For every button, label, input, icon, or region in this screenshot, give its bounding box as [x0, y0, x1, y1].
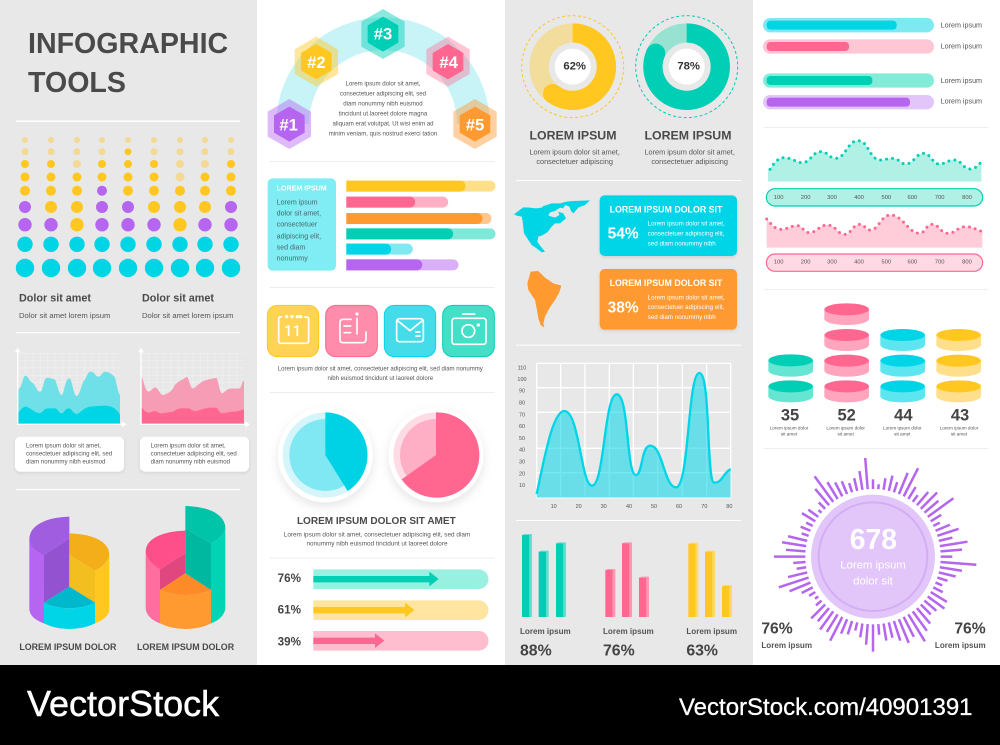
donut captions: Lorem ipsum dolor sit amet,	[529, 147, 620, 156]
arc body text: tincidunt ut laoreet dolore magna	[339, 110, 428, 117]
callout 38%: 38%	[608, 299, 639, 316]
panel: donuts and maps	[514, 16, 741, 346]
dot matrix chart	[16, 137, 240, 277]
panel: horizontal bars text	[268, 178, 336, 271]
axis pill teal: 100	[774, 195, 784, 201]
stat left 76%: Lorem ipsum	[761, 641, 812, 650]
panel: disk stacks and radial chart	[761, 289, 988, 652]
panel: icons, pies and arrows	[267, 305, 494, 651]
chart: pink area	[142, 377, 244, 424]
3D cylinder charts	[19, 506, 235, 652]
hexagon 2: #2	[307, 53, 326, 72]
callout 54%	[600, 195, 737, 256]
callout 38%: sed diam nonummy nibh	[648, 314, 716, 321]
radial ray chart: 678	[850, 524, 897, 556]
progress bar cyan: Lorem ipsum	[941, 22, 982, 30]
axis pill teal: 400	[854, 195, 865, 201]
axis pill teal: 500	[881, 195, 892, 201]
hexagon 4: #4	[439, 53, 459, 72]
line area chart: 80	[519, 401, 525, 407]
chart: cyan area	[18, 372, 120, 424]
cylinder left	[29, 517, 109, 629]
hexagon 1: #1	[279, 115, 298, 134]
icon: camera	[443, 305, 494, 357]
disk stack 44	[880, 329, 925, 436]
axis pill pink: 600	[907, 260, 918, 266]
progress bar purple	[763, 95, 982, 109]
arc body text: minim veniam, quis nostrud exerci tation	[329, 130, 437, 137]
disk stack 52	[824, 303, 869, 436]
arrow bar 39%	[278, 631, 488, 651]
stat left 76%: 76%	[761, 621, 793, 638]
3D bar charts	[516, 520, 741, 660]
line area chart: 50	[651, 504, 657, 510]
chart axes	[15, 348, 250, 427]
stat right 76%: 76%	[954, 621, 986, 638]
line area chart: 100	[517, 377, 527, 383]
pie caption: nonummy nibh euismod tincidunt ut laoreet dolore	[306, 540, 448, 547]
text card right	[140, 437, 249, 472]
line area chart: 30	[519, 459, 525, 465]
footer watermark bar: VectorStock	[27, 683, 220, 724]
donut 62%: 62%	[563, 61, 586, 73]
cylinder captions: LOREM IPSUM DOLOR	[19, 642, 117, 652]
arrow bar 39%: 39%	[278, 635, 302, 648]
title: INFOGRAPHIC	[28, 28, 228, 60]
icon: calendar	[267, 305, 319, 357]
axis pill pink: 500	[881, 260, 892, 266]
callout 54%: sed diam nonummy nibh	[648, 240, 716, 247]
line area chart: 110	[518, 365, 526, 371]
disk stack 44: 44	[894, 406, 913, 424]
axis pill teal: 300	[827, 195, 838, 201]
bars: green	[520, 534, 571, 660]
hexagon 1	[268, 99, 311, 149]
panel: horizontal bars text: Lorem ipsum	[277, 198, 318, 206]
icons caption: Lorem ipsum dolor sit amet, consectetuer adipiscing elit, sed diam nonummy	[278, 366, 484, 372]
line area chart: 80	[726, 504, 732, 510]
donut captions: Lorem ipsum dolor sit amet,	[644, 147, 735, 156]
hexagon 5: #5	[466, 115, 484, 134]
dotted area chart teal	[768, 141, 981, 182]
disk stack 43: sit amet	[951, 431, 968, 436]
axis pill teal: 700	[935, 195, 945, 201]
axis pill teal: 600	[907, 195, 918, 201]
progress bar purple: Lorem ipsum	[941, 98, 982, 106]
line area chart: 10	[519, 483, 525, 489]
text card left: diam nonummy nibh euismod	[26, 458, 105, 465]
disk stack 52: Lorem ipsum dolor	[826, 425, 865, 430]
line area chart: 20	[576, 504, 582, 510]
line area chart: 60	[676, 504, 682, 510]
axis pill pink: 800	[962, 260, 973, 266]
panel: horizontal bars text: consectetuer	[277, 221, 318, 229]
icon: south america map	[527, 271, 561, 328]
icon: envelope	[384, 305, 436, 357]
donut captions: LOREM IPSUM	[530, 128, 616, 142]
callout 38%: Lorem ipsum dolor sit amet,	[648, 294, 725, 301]
arc body text: aliquam erat volutpat. Ut wisi enim ad	[332, 120, 434, 127]
arrow bar 76%: 76%	[278, 572, 302, 585]
disk stack 35: 35	[781, 406, 799, 424]
disk stack 43: Lorem ipsum dolor	[940, 425, 979, 430]
cylinder captions	[19, 642, 235, 652]
hexagon 3	[361, 9, 405, 59]
pie chart cyan	[278, 408, 373, 502]
arrow bar 61%: 61%	[278, 604, 302, 617]
title	[28, 28, 228, 99]
arrow bar 61%	[278, 600, 488, 620]
dot chart captions: Dolor sit amet	[19, 292, 91, 304]
disk stack 43: 43	[951, 406, 969, 424]
axis pill pink	[766, 254, 983, 271]
panel: progress bars and dotted charts	[763, 18, 988, 271]
dot chart captions	[19, 292, 233, 320]
bars: green: Lorem ipsum	[520, 627, 571, 636]
pie heading: LOREM IPSUM DOLOR SIT AMET	[297, 516, 457, 527]
callout 38%	[600, 269, 737, 330]
disk stack 43	[936, 329, 981, 436]
axis pill teal: 200	[801, 195, 811, 201]
line area chart	[517, 363, 732, 510]
pie caption: Lorem ipsum dolor sit amet, consectetuer adipiscing elit, sed diam	[284, 531, 470, 538]
panel: horizontal bars text: nonummy	[277, 255, 308, 263]
arc body text: Lorem ipsum dolor sit amet,	[345, 81, 421, 88]
dotted area chart pink	[767, 215, 982, 248]
bars: pink: Lorem ipsum	[603, 627, 654, 636]
horizontal bar chart	[346, 181, 495, 270]
progress bar teal	[763, 73, 982, 88]
donut captions: LOREM IPSUM	[645, 128, 731, 142]
stat left 76%	[761, 621, 812, 650]
axis pill pink: 700	[935, 260, 945, 266]
line area chart: 30	[601, 504, 607, 510]
arc body text	[329, 81, 437, 137]
icon: north america map	[514, 200, 590, 252]
text card left	[15, 437, 124, 472]
line area chart: 90	[519, 389, 525, 395]
icon: clipboard note	[326, 305, 377, 357]
text card right: diam nonummy nibh euismod	[151, 458, 230, 465]
disk stack 52: sit amet	[838, 431, 855, 436]
hexagon 3: #3	[374, 25, 392, 44]
line area chart: 40	[519, 448, 525, 454]
dot chart captions: Dolor sit amet lorem ipsum	[19, 311, 110, 320]
panel: numbered hexagon arc	[268, 9, 497, 288]
radial ray chart: Lorem ipsum	[840, 559, 906, 571]
donut 78%: 78%	[677, 61, 700, 73]
icons caption	[278, 366, 484, 382]
stat right 76%	[935, 621, 986, 650]
donut captions: consectetuer adipiscing	[651, 157, 728, 166]
bars: pink	[603, 542, 654, 660]
dot chart captions: Dolor sit amet	[142, 292, 214, 304]
pie chart pink	[389, 408, 483, 502]
text card right: consectetuer adipiscing elit, sed	[151, 450, 237, 457]
line area chart: 10	[551, 504, 557, 510]
radial ray chart: dolor sit	[853, 575, 894, 587]
text card right: Lorem ipsum dolor sit amet,	[151, 442, 226, 449]
arc body text: diam nonummy nibh euismod	[343, 100, 423, 107]
bars: yellow	[686, 543, 737, 660]
progress bar pink	[763, 39, 982, 54]
pie caption	[284, 531, 470, 547]
bars: yellow: 63%	[686, 643, 718, 660]
dot chart captions: Dolor sit amet lorem ipsum	[142, 311, 233, 320]
disk stack 44: Lorem ipsum dolor	[883, 425, 922, 430]
callout 38%: LOREM IPSUM DOLOR SIT	[610, 278, 723, 288]
callout 38%: consectetuer adipiscing elit,	[648, 304, 725, 311]
axis pill pink: 300	[827, 260, 838, 266]
text card left: Lorem ipsum dolor sit amet,	[26, 442, 101, 449]
axis pill teal: 800	[962, 195, 973, 201]
donut 62%	[522, 16, 624, 118]
disk stack 35: Lorem ipsum dolor	[770, 425, 809, 430]
hexagon 4	[426, 37, 470, 87]
disk stack 52: 52	[837, 406, 856, 424]
radial ray chart	[774, 458, 976, 652]
axis pill pink: 400	[854, 260, 865, 266]
hexagon 2	[295, 37, 338, 87]
axis pill pink: 100	[774, 260, 784, 266]
text card left: consectetuer adipiscing elit, sed	[26, 450, 112, 457]
line area chart: 50	[519, 436, 525, 442]
disk stack 35: sit amet	[781, 431, 798, 436]
arc body text: consectetuer adipiscing elit, sed	[340, 91, 426, 98]
callout 54%: 54%	[608, 226, 639, 243]
line area chart: 70	[701, 504, 707, 510]
callout 54%: LOREM IPSUM DOLOR SIT	[610, 204, 723, 214]
progress bar pink: Lorem ipsum	[941, 42, 982, 50]
bars: pink: 76%	[603, 643, 635, 660]
panel: horizontal bars text: adipiscing elit,	[277, 232, 321, 240]
stat right 76%: Lorem ipsum	[935, 641, 986, 650]
callout 54%: consectetuer adipiscing elit,	[648, 230, 725, 237]
footer watermark bar	[0, 665, 1000, 745]
donut 78%	[636, 16, 738, 118]
axis pill teal	[766, 189, 983, 206]
icons caption: nibh euismod tincidunt ut laoreet dolore	[328, 376, 434, 382]
disk stack 35	[768, 354, 813, 436]
donut captions	[529, 128, 735, 166]
footer watermark bar: VectorStock.com/40901391	[679, 694, 973, 721]
bars: green: 88%	[520, 643, 552, 660]
donut captions: consectetuer adipiscing	[536, 157, 613, 166]
line area chart: 60	[519, 424, 525, 430]
panel: horizontal bars text: LOREM IPSUM	[277, 185, 327, 193]
line area chart: 70	[519, 412, 525, 418]
panel: horizontal bars text: dolor sit amet,	[277, 210, 321, 218]
title: TOOLS	[28, 67, 126, 99]
progress bar teal: Lorem ipsum	[941, 77, 982, 85]
line area chart: 20	[519, 471, 525, 477]
axis pill pink: 200	[801, 260, 811, 266]
hexagon 5	[453, 99, 497, 149]
line area chart: 40	[626, 504, 632, 510]
cylinder captions: LOREM IPSUM DOLOR	[137, 642, 235, 652]
panel: horizontal bars text: sed diam	[277, 243, 305, 251]
disk stack 44: sit amet	[894, 431, 911, 436]
area charts with cards	[15, 348, 250, 472]
progress bar cyan	[763, 18, 982, 32]
callout 54%: Lorem ipsum dolor sit amet,	[648, 221, 725, 228]
arrow bar 76%	[278, 569, 488, 589]
cylinder right	[146, 506, 225, 629]
bars: yellow: Lorem ipsum	[686, 627, 737, 636]
